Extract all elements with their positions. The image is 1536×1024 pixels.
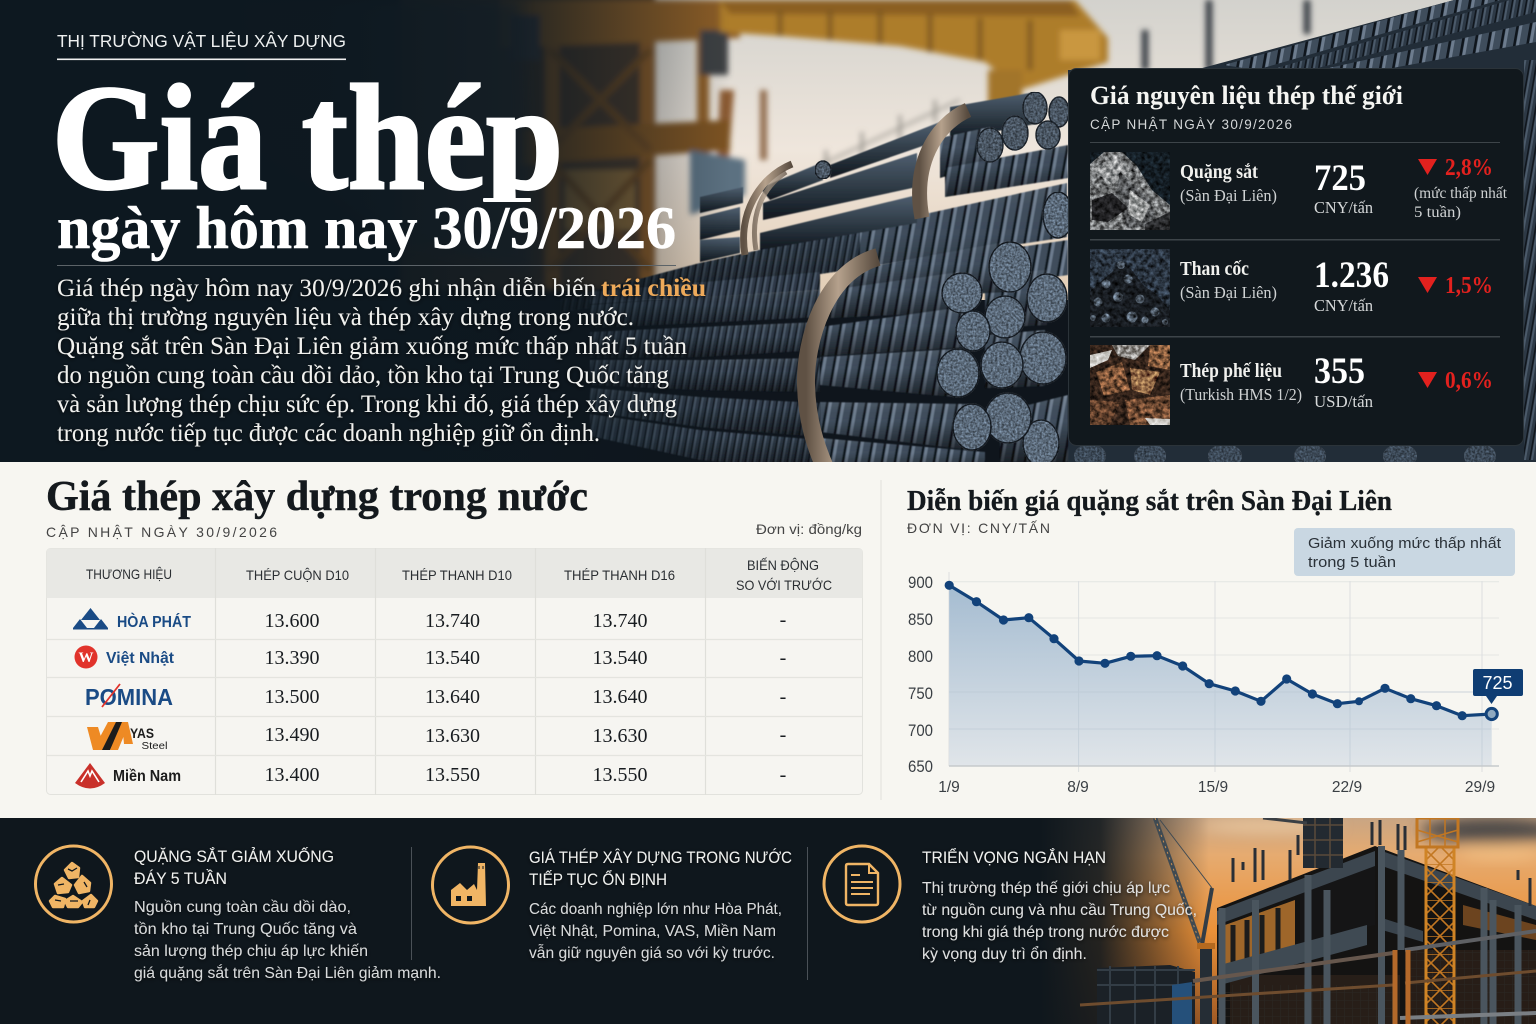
tower crane [1417, 818, 1458, 1024]
row: scrap steel: USD/tấn [1314, 392, 1373, 411]
callout: five week low: trong 5 tuần [1308, 554, 1396, 571]
heading: iron ore chart: Diễn biến giá quặng sắt trên Sàn Đại Liên [907, 485, 1392, 517]
logo: Việt Nhật: Việt Nhật [106, 650, 175, 667]
row: coking coal: 1,5% [1445, 272, 1493, 299]
row: coking coal: Than cốc [1180, 259, 1249, 280]
table values: - [780, 686, 786, 708]
table values [264, 609, 786, 786]
insight 2: domestic steel: Việt Nhật, Pomina, VAS, Miền Nam [529, 923, 776, 940]
hero intro paragraph: Quặng sắt trên Sàn Đại Liên giảm xuống mức thấp nhất 5 tuần [57, 331, 687, 360]
logo: Pomina: POMINA [85, 684, 173, 710]
insight 1: iron ore: giá quặng sắt trên Sàn Đại Liên giảm mạnh. [134, 963, 441, 982]
icon: document [824, 846, 900, 922]
x axis labels: 29/9 [1465, 779, 1495, 796]
title: Giá thép: Giá thép [52, 55, 563, 221]
row: iron ore [1180, 154, 1508, 221]
hero intro paragraph: trong nước tiếp tục được các doanh nghiệp giữ ổn định. [57, 418, 600, 447]
logo: Miền Nam [75, 763, 181, 788]
insight 2: domestic steel: vẫn giữ nguyên giá so với kỳ trước. [529, 943, 775, 962]
panel heading: Giá nguyên liệu thép thế giới [1090, 81, 1403, 110]
heading: domestic prices: Giá thép xây dựng trong nước [46, 474, 588, 520]
table values: - [780, 764, 786, 786]
row: scrap steel [1180, 351, 1493, 411]
table values: 13.550 [425, 764, 480, 786]
chart unit: ĐƠN VỊ: CNY/TẤN [907, 520, 1050, 536]
table header: THƯƠNG HIỆU [86, 566, 172, 582]
x axis labels: 15/9 [1198, 779, 1228, 796]
insight 1: iron ore [134, 846, 441, 982]
table values: - [780, 724, 786, 746]
insight 3: outlook: từ nguồn cung và nhu cầu Trung Quốc, [922, 902, 1197, 919]
icon: gold ore pile [36, 846, 112, 922]
value tag: 725: 725 [1482, 673, 1513, 693]
insight 2: domestic steel: TIẾP TỤC ỔN ĐỊNH [529, 870, 667, 889]
hero kicker: THỊ TRƯỜNG VẬT LIỆU XÂY DỰNG [57, 30, 346, 51]
insight 2: domestic steel: GIÁ THÉP XÂY DỰNG TRONG NƯỚC [529, 848, 792, 867]
crane left [1155, 818, 1215, 1024]
hero photo: steel rebar yard with crane [0, 0, 1536, 475]
row: iron ore: CNY/tấn [1314, 198, 1373, 217]
rebar ends below the panel [1074, 446, 1496, 462]
row: coking coal: (Sàn Đại Liên) [1180, 283, 1277, 302]
table header: THÉP THANH D16 [564, 567, 675, 583]
row: iron ore: 2,8% [1445, 154, 1493, 181]
icon: coking coal photo [1090, 249, 1170, 327]
insight 3: outlook: TRIỂN VỌNG NGẮN HẠN [922, 848, 1106, 867]
icon: iron ore photo [1090, 152, 1170, 230]
insight 3: outlook: Thị trường thép thế giới chịu áp lực [922, 880, 1170, 897]
table values: 13.490 [264, 724, 320, 746]
table values: 13.630 [425, 725, 480, 747]
foreground rebar ends [937, 192, 1073, 466]
hero intro paragraph [57, 273, 706, 447]
title: Giá thép [57, 82, 559, 202]
y axis labels: 850 [908, 611, 933, 629]
y axis labels: 700 [908, 722, 933, 740]
row: coking coal: CNY/tấn [1314, 296, 1373, 315]
hero intro paragraph: Giá thép ngày hôm nay 30/9/2026 ghi nhận diễn biến [57, 273, 596, 302]
insight 1: iron ore: Nguồn cung toàn cầu dồi dào, [134, 899, 351, 916]
row: scrap steel: Thép phế liệu [1180, 361, 1282, 382]
logo: Việt Nhật [74, 646, 175, 668]
insight 1: iron ore: QUẶNG SẮT GIẢM XUỐNG [134, 846, 334, 866]
table values: 13.740 [592, 610, 648, 632]
y axis labels [908, 574, 933, 776]
hero intro paragraph: giữa thị trường nguyên liệu và thép xây dựng trong nước. [57, 302, 634, 331]
row: iron ore: (mức thấp nhất [1414, 185, 1508, 202]
fence rails [1080, 931, 1536, 1024]
insight 1: iron ore: sản lượng thép chịu áp lực khiến [134, 943, 368, 960]
table values: 13.500 [264, 686, 320, 708]
callout: five week low [1294, 528, 1515, 576]
table values: 13.640 [592, 686, 648, 708]
light middle section background [0, 462, 1536, 818]
insight 1: iron ore: tồn kho tại Trung Quốc tăng và [134, 921, 357, 938]
y axis labels: 800 [908, 648, 933, 666]
foreground rebar bars [820, 240, 1068, 475]
table header: THÉP THANH D10 [402, 567, 512, 583]
upper bundle bar ends [815, 92, 1069, 179]
table values: 13.540 [425, 647, 480, 669]
logo: YAS Steel [87, 722, 168, 752]
icon: scrap steel photo [1090, 345, 1170, 425]
logo: YAS Steel: Steel [142, 740, 168, 752]
line chart: iron ore price [908, 572, 1523, 796]
row: iron ore: Quặng sắt [1180, 162, 1258, 183]
hero intro paragraph: và sản lượng thép chịu sức ép. Trong khi đó, giá thép xây dựng [57, 389, 677, 418]
hero intro paragraph: trái chiều [601, 273, 706, 302]
table values: - [780, 647, 786, 669]
logo: Miền Nam: Miền Nam [113, 768, 181, 785]
row: scrap steel: 355 [1314, 351, 1365, 392]
top right rebar stack [1068, 0, 1536, 462]
logo: Hòa Phát: HÒA PHÁT [117, 613, 191, 631]
banding straps [744, 110, 968, 255]
insight 3: outlook [922, 848, 1197, 963]
x axis labels: 8/9 [1067, 779, 1089, 796]
insight 2: domestic steel [529, 848, 792, 962]
table values: 13.630 [592, 725, 648, 747]
icon: factory [432, 847, 508, 923]
row: coking coal: 1.236 [1314, 255, 1389, 296]
table values: 13.400 [264, 764, 320, 786]
y axis labels: 900 [908, 574, 933, 592]
row: iron ore: (Sàn Đại Liên) [1180, 186, 1277, 205]
value tag: 725 [1473, 669, 1523, 704]
x axis labels: 1/9 [938, 779, 960, 796]
insight 2: domestic steel: Các doanh nghiệp lớn như Hòa Phát, [529, 901, 782, 918]
table header [86, 557, 832, 593]
insight 3: outlook: trong khi giá thép trong nước được [922, 924, 1169, 941]
row: iron ore: 5 tuần) [1414, 204, 1461, 221]
row: scrap steel: 0,6% [1445, 367, 1493, 394]
table header: SO VỚI TRƯỚC [736, 577, 832, 593]
row: scrap steel: (Turkish HMS 1/2) [1180, 385, 1302, 404]
x axis labels: 22/9 [1332, 779, 1362, 796]
x axis labels [938, 779, 1495, 796]
table values: 13.550 [592, 764, 648, 786]
row: iron ore: 725 [1314, 158, 1366, 199]
table values: 13.540 [592, 647, 648, 669]
domestic update date: CẬP NHẬT NGÀY 30/9/2026 [46, 524, 277, 540]
table header: BIẾN ĐỘNG [747, 557, 819, 573]
logo: Việt Nhật: W [78, 650, 94, 666]
table header: THÉP CUỘN D10 [246, 567, 349, 583]
panel update date: CẬP NHẬT NGÀY 30/9/2026 [1090, 117, 1292, 132]
table: domestic steel prices [46, 548, 862, 795]
y axis labels: 750 [908, 685, 933, 703]
table values: - [780, 609, 786, 631]
logo: YAS Steel: YAS [130, 725, 154, 741]
unit note: Đơn vị: đồng/kg [756, 521, 862, 537]
table values: 13.600 [264, 610, 320, 632]
subtitle: ngày hôm nay: ngày hôm nay 30/9/2026 [57, 195, 676, 261]
table values: 13.740 [425, 610, 480, 632]
bottom band with construction photo [0, 817, 1536, 1024]
hero intro paragraph: do nguồn cung toàn cầu dồi dảo, tồn kho tại Trung Quốc tăng [57, 360, 669, 389]
callout: five week low: Giảm xuống mức thấp nhất [1308, 535, 1502, 552]
insight 3: outlook: kỳ vọng duy trì ổn định. [922, 945, 1087, 963]
insight 1: iron ore: ĐÁY 5 TUẦN [134, 869, 227, 888]
table values: 13.390 [264, 647, 320, 669]
panel: world raw material prices [1068, 68, 1524, 446]
logo: Hòa Phát [73, 608, 191, 631]
far rebar rows [560, 92, 1068, 470]
y axis labels: 650 [908, 758, 933, 776]
table values: 13.640 [425, 686, 480, 708]
row: coking coal [1180, 255, 1493, 315]
